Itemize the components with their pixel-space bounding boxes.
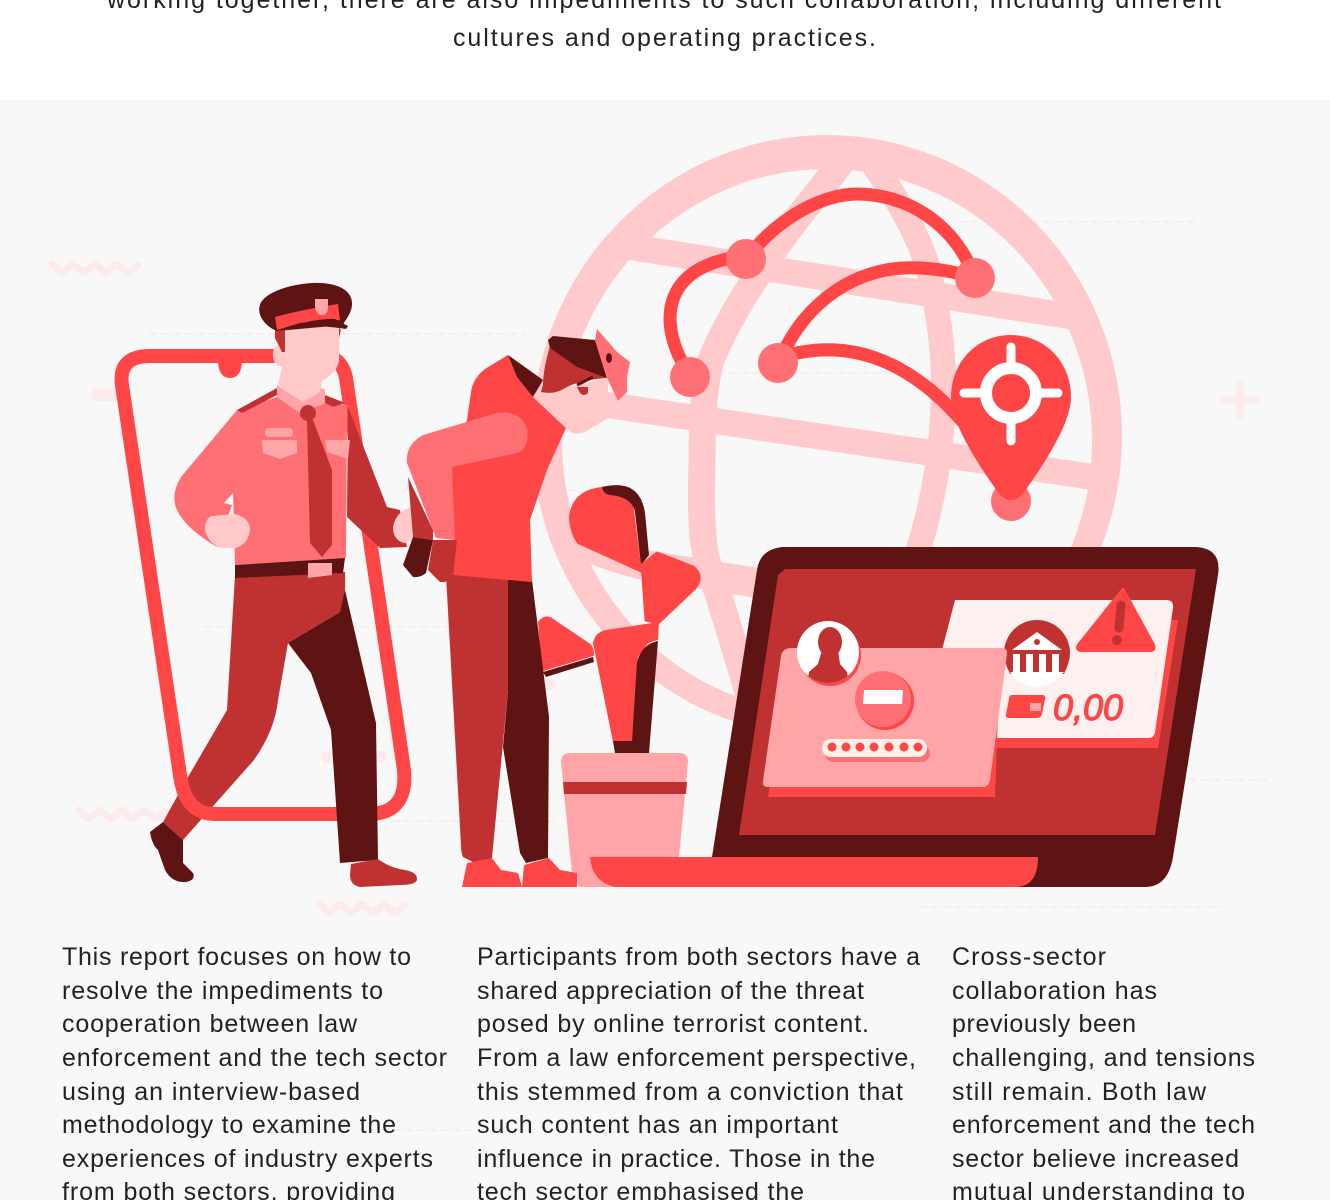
balance value: 0,00: [1053, 687, 1123, 728]
text column 3: sector believe increased: [952, 1145, 1239, 1173]
text column 1: enforcement and the tech sector: [62, 1044, 447, 1072]
icon: warning triangle: [1078, 590, 1154, 650]
man collar: [508, 355, 543, 397]
man torso: [452, 355, 566, 582]
officer hands: [205, 506, 415, 548]
man left leg: [446, 575, 508, 863]
laptop: [590, 547, 1219, 887]
text column 2: [477, 943, 920, 1200]
flower pot: [561, 753, 688, 887]
officer belt: [235, 558, 345, 578]
text column 2: this stemmed from a conviction that: [477, 1078, 903, 1106]
icon: wallet: [1006, 695, 1045, 718]
man cuffed hands: [403, 537, 457, 582]
login card: [763, 648, 1007, 797]
man right leg: [503, 580, 549, 863]
icon: no entry sign: [855, 671, 914, 730]
officer shirt: [174, 397, 347, 565]
text column 1: cooperation between law: [62, 1010, 358, 1038]
police officer: [122, 283, 417, 887]
text column 2: shared appreciation of the threat: [477, 977, 864, 1005]
laptop screen: [739, 569, 1196, 835]
officer front leg: [163, 572, 345, 840]
arrested man: [403, 329, 630, 887]
plant: [539, 485, 699, 753]
officer hair: [275, 328, 341, 352]
text column 3: still remain. Both law: [952, 1078, 1207, 1106]
text column 3: previously been: [952, 1010, 1136, 1038]
network nodes: [670, 239, 1031, 521]
phone outline: [122, 356, 404, 814]
text column 1: This report focuses on how to: [62, 943, 411, 971]
globe: [532, 135, 1122, 737]
officer collar and epaulettes: [237, 385, 345, 413]
officer back leg: [288, 590, 378, 863]
man front arm: [407, 413, 528, 540]
laptop base: [590, 857, 1038, 887]
officer feet: [150, 822, 417, 887]
text column 2: Participants from both sectors have a: [477, 943, 920, 971]
intro text: [106, 0, 1221, 52]
background decoration: [52, 222, 1266, 1130]
bank card: [942, 600, 1178, 748]
intro text: cultures and operating practices.: [453, 24, 876, 52]
man back arm: [408, 477, 433, 540]
officer right arm: [347, 407, 407, 548]
icon: bank: [1004, 620, 1070, 687]
password field: [822, 739, 930, 762]
officer head: [273, 325, 340, 402]
text column 1: [62, 943, 447, 1200]
text column 1: experiences of industry experts: [62, 1145, 433, 1173]
icon: location pin: [951, 335, 1071, 500]
laptop body: [712, 547, 1219, 887]
text column 2: posed by online terrorist content.: [477, 1010, 869, 1038]
officer pockets: [262, 428, 350, 459]
officer cap: [259, 283, 352, 331]
text column 1: using an interview-based: [62, 1078, 360, 1106]
network route lines: [670, 194, 975, 428]
text column 3: enforcement and the tech: [952, 1111, 1255, 1139]
text column 2: such content has an important: [477, 1111, 838, 1139]
text column 3: challenging, and tensions: [952, 1044, 1255, 1072]
text column 1: resolve the impediments to: [62, 977, 383, 1005]
text column 3: collaboration has: [952, 977, 1157, 1005]
text column 2: influence in practice. Those in the: [477, 1145, 875, 1173]
icon: user avatar: [797, 621, 861, 690]
text column 3: Cross-sector: [952, 943, 1106, 971]
text column 3: [952, 943, 1255, 1200]
man shoes: [462, 858, 577, 887]
officer tie: [300, 405, 332, 557]
man head: [533, 329, 630, 434]
text column 1: methodology to examine the: [62, 1111, 396, 1139]
text column 2: From a law enforcement perspective,: [477, 1044, 916, 1072]
